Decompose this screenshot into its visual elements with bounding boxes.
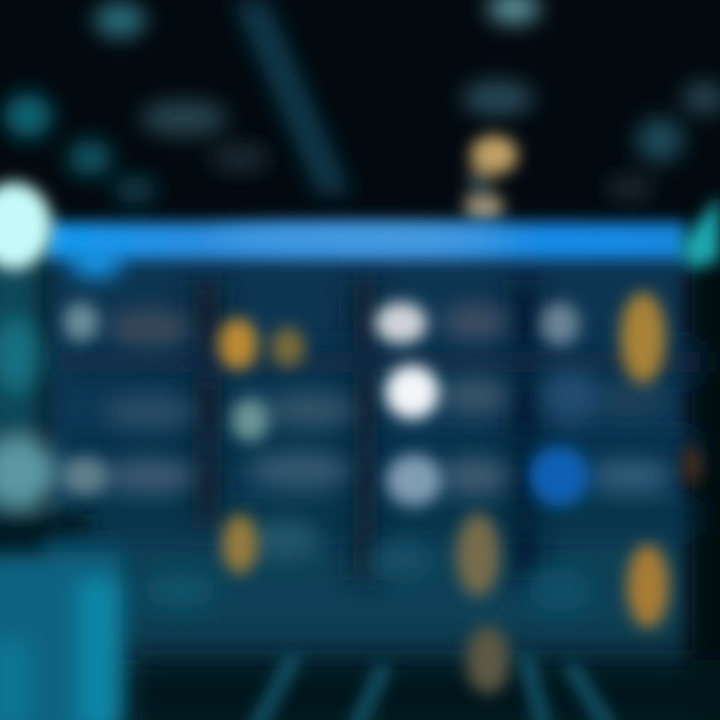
vertical light streak (232, 0, 352, 195)
header bar glow (70, 228, 510, 278)
table rows (104, 304, 670, 612)
bottom light lines (255, 655, 610, 720)
left teal column (0, 260, 122, 720)
bright orb at left (0, 182, 52, 270)
blue header bar (46, 222, 686, 260)
main dark blue panel (45, 250, 695, 720)
panel column shading (60, 260, 720, 720)
amber dot above bar (464, 135, 518, 221)
white and amber icons (61, 292, 702, 694)
upper floating dots and streaks (4, 0, 720, 221)
teal glow at right (680, 195, 720, 270)
